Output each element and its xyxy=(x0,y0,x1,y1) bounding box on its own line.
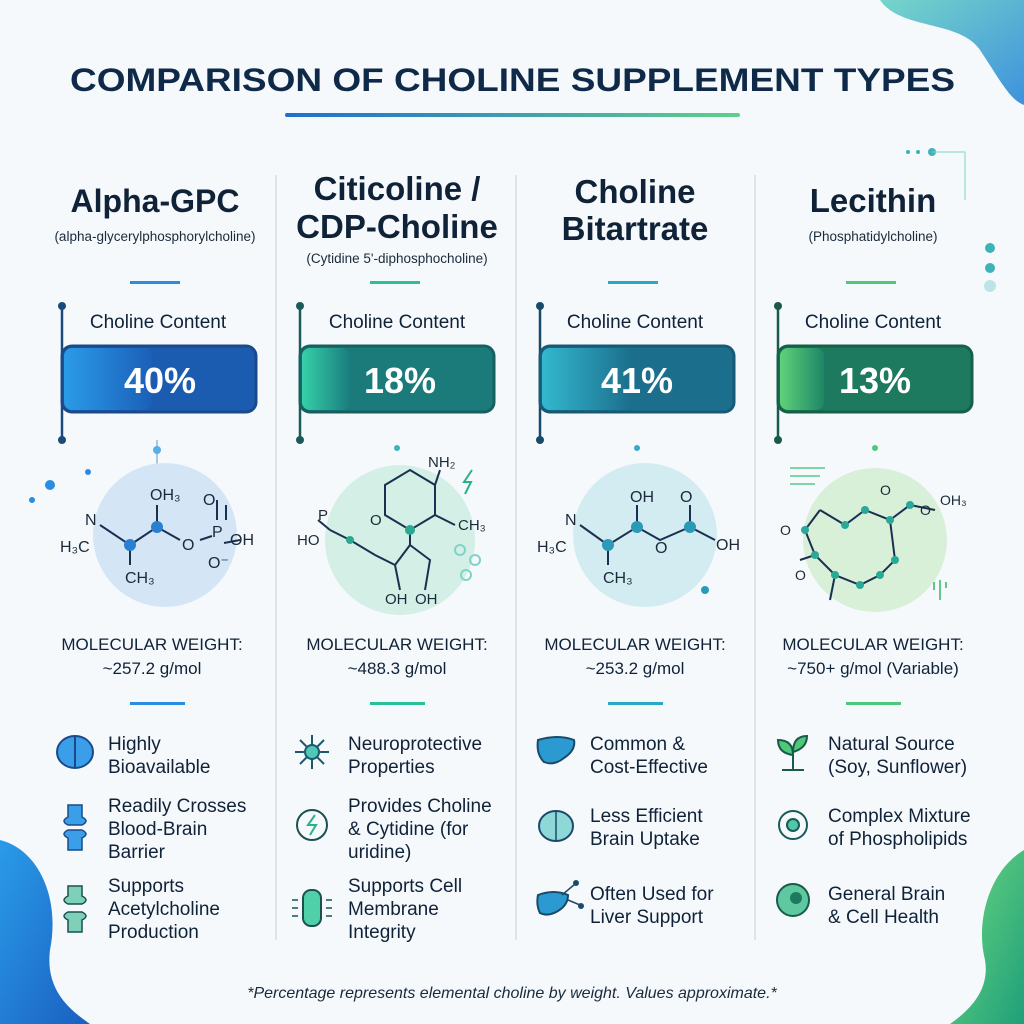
choline content bar xyxy=(774,302,972,444)
footnote: *Percentage represents elemental choline by weight. Values approximate.* xyxy=(247,985,778,1002)
molecule: H₃C xyxy=(60,539,90,556)
molecule: N xyxy=(565,512,577,529)
icon: brain xyxy=(57,736,93,768)
molecule: CH₃ xyxy=(603,570,633,587)
molecule: HO xyxy=(297,532,320,549)
molecule: O xyxy=(880,482,891,498)
title: COMPARISON OF CHOLINE SUPPLEMENT TYPES xyxy=(70,62,955,98)
benefits list: Supports xyxy=(108,876,184,897)
choline content bar: 41% xyxy=(601,360,673,401)
icon: cycle xyxy=(297,810,327,840)
molecule: NH₂ xyxy=(428,454,456,471)
heading: Lecithin xyxy=(810,182,936,219)
molecular weight xyxy=(544,635,726,705)
icon: liver network xyxy=(537,880,584,915)
molecule: N xyxy=(85,512,97,529)
choline content bar: 40% xyxy=(124,360,196,401)
benefits list: Complex Mixture xyxy=(828,806,971,827)
icon: cell membrane xyxy=(292,890,332,926)
benefits list xyxy=(292,734,492,943)
molecular weight: MOLECULAR WEIGHT: xyxy=(782,635,964,654)
icon: synapse xyxy=(64,886,86,932)
heading: (Phosphatidylcholine) xyxy=(808,229,938,244)
benefits list: uridine) xyxy=(348,842,411,863)
benefits list: Integrity xyxy=(348,922,416,943)
icon: neuron xyxy=(295,735,329,769)
icon: liver xyxy=(538,737,574,763)
molecule: O xyxy=(780,522,791,538)
benefits list: Natural Source xyxy=(828,734,955,755)
column 1: Alpha-GPC xyxy=(29,183,256,943)
benefits list: Acetylcholine xyxy=(108,899,220,920)
choline content bar: Choline Content xyxy=(90,312,227,333)
molecule: OH₃ xyxy=(150,487,181,504)
benefits list: & Cell Health xyxy=(828,907,939,928)
molecule xyxy=(29,440,254,607)
molecular weight xyxy=(61,635,243,705)
dividers xyxy=(276,175,755,940)
molecule xyxy=(297,445,486,615)
molecule: OH xyxy=(385,591,408,608)
heading: Bitartrate xyxy=(562,210,708,247)
benefits list: & Cytidine (for xyxy=(348,819,469,840)
molecular weight: MOLECULAR WEIGHT: xyxy=(306,635,488,654)
benefits list: Common & xyxy=(590,734,685,755)
benefits list: General Brain xyxy=(828,884,945,905)
molecule: H₃C xyxy=(537,539,567,556)
benefits list xyxy=(777,734,971,928)
benefits list: Brain Uptake xyxy=(590,829,700,850)
heading: Citicoline / xyxy=(314,170,480,207)
choline content bar xyxy=(58,302,256,444)
heading xyxy=(808,182,938,284)
molecule: OH₃ xyxy=(940,492,967,508)
heading xyxy=(562,173,708,284)
molecular weight xyxy=(782,635,964,705)
molecule: O⁻ xyxy=(208,555,229,572)
heading: Alpha-GPC xyxy=(71,183,239,219)
benefits list: Cost-Effective xyxy=(590,757,708,778)
benefits list xyxy=(57,734,246,943)
benefits list: Often Used for xyxy=(590,884,714,905)
choline content bar: Choline Content xyxy=(805,312,942,333)
icon: brain xyxy=(539,811,573,841)
molecule: O xyxy=(680,489,692,506)
molecular weight: MOLECULAR WEIGHT: xyxy=(61,635,243,654)
column 2: Citicoline xyxy=(292,170,498,943)
heading xyxy=(296,170,498,284)
heading: (alpha-glycerylphosphorylcholine) xyxy=(54,229,256,244)
molecular weight: ~488.3 g/mol xyxy=(348,659,446,678)
molecular weight: ~253.2 g/mol xyxy=(586,659,684,678)
icon: phospholipid ring xyxy=(779,811,807,839)
benefits list: of Phospholipids xyxy=(828,829,967,850)
choline content bar xyxy=(296,302,494,444)
heading xyxy=(54,183,256,284)
molecule: CH₃ xyxy=(125,570,155,587)
decorative corner bottom left xyxy=(0,840,90,1024)
choline content bar: Choline Content xyxy=(329,312,466,333)
molecule: OH xyxy=(415,591,438,608)
molecular weight: MOLECULAR WEIGHT: xyxy=(544,635,726,654)
molecule: O xyxy=(182,537,194,554)
icon: plant xyxy=(778,736,807,770)
heading: CDP-Choline xyxy=(296,208,498,245)
molecule: CH₃ xyxy=(458,517,486,534)
benefits list: Provides Choline xyxy=(348,796,492,817)
decorative corner bottom right xyxy=(950,850,1024,1024)
molecule xyxy=(537,445,740,607)
benefits list: Properties xyxy=(348,757,435,778)
column 4: Lecithin xyxy=(774,182,972,928)
benefits list: Readily Crosses xyxy=(108,796,246,817)
molecule: O xyxy=(655,540,667,557)
molecule: O xyxy=(920,502,931,518)
choline content bar: 13% xyxy=(839,360,911,401)
molecule: O xyxy=(370,512,382,529)
molecule: O xyxy=(795,567,806,583)
molecule: O xyxy=(203,492,215,509)
benefits list: Liver Support xyxy=(590,907,704,928)
choline content bar: 18% xyxy=(364,360,436,401)
molecular weight: ~750+ g/mol (Variable) xyxy=(787,659,959,678)
benefits list: Blood-Brain xyxy=(108,819,207,840)
molecular weight xyxy=(306,635,488,705)
benefits list: Membrane xyxy=(348,899,439,920)
molecule: OH xyxy=(630,489,654,506)
benefits list: Highly xyxy=(108,734,161,755)
choline content bar: Choline Content xyxy=(567,312,704,333)
decorative dots top right xyxy=(906,148,996,292)
molecular weight: ~257.2 g/mol xyxy=(103,659,201,678)
benefits list: Supports Cell xyxy=(348,876,462,897)
molecule: P xyxy=(318,507,328,524)
column 3: Choline Bitartrate xyxy=(536,173,740,928)
icon: cell xyxy=(777,884,809,916)
benefits list: Less Efficient xyxy=(590,806,703,827)
heading: Choline xyxy=(574,173,696,210)
molecule: P xyxy=(212,524,223,541)
molecule xyxy=(780,445,967,612)
benefits list: Bioavailable xyxy=(108,757,210,778)
benefits list: Neuroprotective xyxy=(348,734,482,755)
benefits list xyxy=(537,734,714,928)
decorative corner top right xyxy=(880,0,1024,105)
choline content bar xyxy=(536,302,734,444)
molecule: OH xyxy=(230,532,254,549)
benefits list: Barrier xyxy=(108,842,166,863)
benefits list: Production xyxy=(108,922,199,943)
benefits list: (Soy, Sunflower) xyxy=(828,757,967,778)
title xyxy=(70,62,955,117)
heading: (Cytidine 5'-diphosphocholine) xyxy=(306,251,488,266)
molecule: OH xyxy=(716,537,740,554)
icon: joint xyxy=(64,805,86,850)
